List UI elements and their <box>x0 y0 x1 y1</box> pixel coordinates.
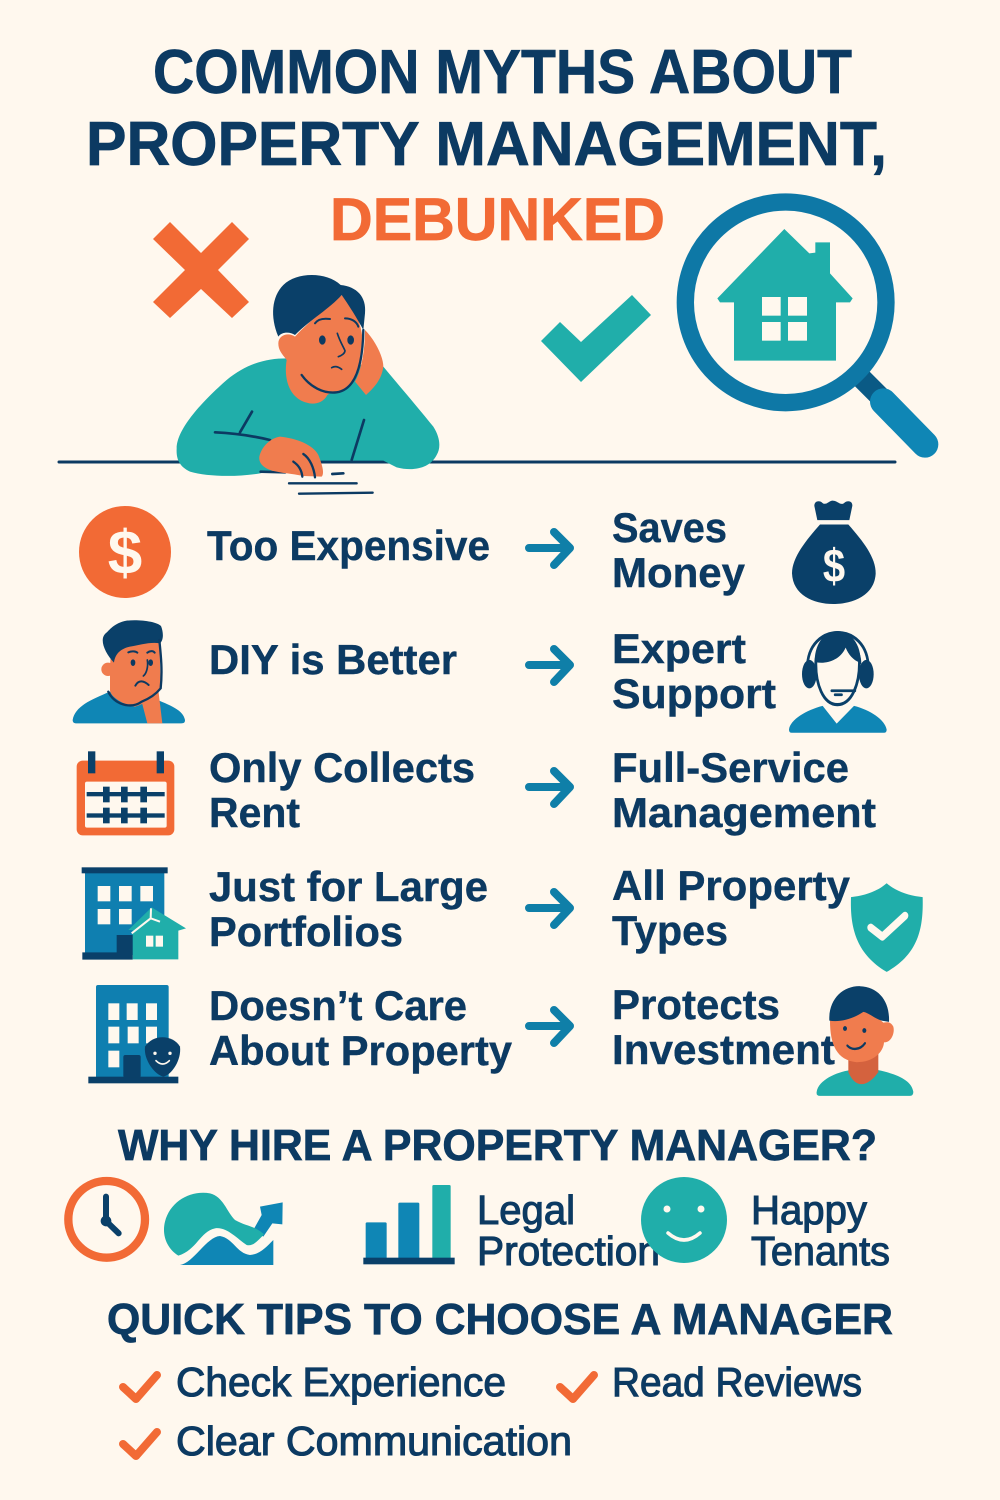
row 3: only collects rent, full-service management <box>77 744 876 836</box>
icon: building with tenant mask <box>88 985 180 1083</box>
myth text <box>209 863 488 955</box>
title: DEBUNKED <box>330 186 665 253</box>
icon: clock <box>68 1181 145 1258</box>
arrow <box>529 532 570 565</box>
icon: teal check mark <box>541 295 651 382</box>
arrow <box>529 892 570 925</box>
legal protection label: Protection <box>477 1228 660 1274</box>
fact text <box>612 862 851 954</box>
fact text: Full-Service <box>612 744 849 791</box>
illustration: confused person at desk <box>177 275 439 494</box>
myth text <box>209 744 475 836</box>
myth text <box>209 982 513 1074</box>
tip: read reviews: Read Reviews <box>612 1359 862 1405</box>
icon: dollar coin <box>79 506 171 598</box>
fact text <box>612 744 876 836</box>
myth text: About Property <box>209 1027 513 1074</box>
fact text: All Property <box>612 862 851 909</box>
icon: support agent with headset <box>789 632 887 733</box>
fact text: Saves <box>612 504 727 551</box>
fact text: Management <box>612 789 876 836</box>
arrow <box>529 1010 570 1043</box>
icon: frustrated man <box>73 620 185 723</box>
fact text: Protects <box>612 981 780 1028</box>
icon: bar chart <box>363 1185 455 1264</box>
legal protection label <box>477 1187 660 1274</box>
fact text: Money <box>612 549 746 596</box>
heading: quick tips: QUICK TIPS TO CHOOSE A MANAGER <box>107 1295 893 1344</box>
row 1: too expensive, saves money <box>79 501 876 604</box>
arrow <box>529 649 570 682</box>
icon: smiley face <box>641 1177 727 1263</box>
fact text: Investment <box>612 1026 835 1073</box>
happy tenants label: Tenants <box>751 1228 890 1274</box>
fact text: Expert <box>612 625 746 672</box>
myth text: Only Collects <box>209 744 475 791</box>
legal protection label: Legal <box>477 1187 575 1233</box>
tip: clear communication: Clear Communication <box>176 1418 572 1464</box>
panel: myth versus fact rows <box>73 501 923 1096</box>
myth text: Doesn’t Care <box>209 982 467 1029</box>
table line <box>59 460 895 464</box>
happy tenants label: Happy <box>751 1187 867 1233</box>
myth text: Too Expensive <box>207 522 490 569</box>
row 4: just for large portfolios, all property types <box>82 862 923 972</box>
tip: check experience: Check Experience <box>176 1359 506 1405</box>
myth text: Portfolios <box>209 908 403 955</box>
myth text: DIY is Better <box>209 636 457 683</box>
panel: why hire icons <box>68 1177 890 1274</box>
myth text: Just for Large <box>209 863 488 910</box>
icon: apartment building and house <box>82 867 186 960</box>
icon: money bag <box>792 501 876 604</box>
icon: dollar coin: $ <box>108 519 142 588</box>
icon: red cross <box>153 222 249 318</box>
panel: quick tips checklist <box>123 1359 862 1464</box>
fact text: Support <box>612 670 776 717</box>
icon: rising wave chart <box>164 1193 283 1265</box>
title: PROPERTY MANAGEMENT, <box>86 110 887 179</box>
title: COMMON MYTHS ABOUT <box>153 38 852 107</box>
icon: smiling owner <box>817 986 913 1096</box>
arrow <box>529 771 570 804</box>
myth text: Rent <box>209 789 300 836</box>
icon: shield with check <box>851 883 923 972</box>
icon: calendar <box>77 751 174 835</box>
heading: why hire: WHY HIRE A PROPERTY MANAGER? <box>118 1121 877 1170</box>
icon: money bag: $ <box>823 540 845 593</box>
happy tenants label <box>751 1187 890 1274</box>
fact text: Types <box>612 907 728 954</box>
row 5: doesn't care about property, protects investment <box>88 981 913 1096</box>
fact text <box>612 981 835 1073</box>
icon: magnifying glass with house <box>685 202 925 444</box>
title <box>86 38 887 253</box>
fact text <box>612 625 776 717</box>
fact text <box>612 504 746 596</box>
row 2: DIY is better, expert support <box>73 620 887 733</box>
